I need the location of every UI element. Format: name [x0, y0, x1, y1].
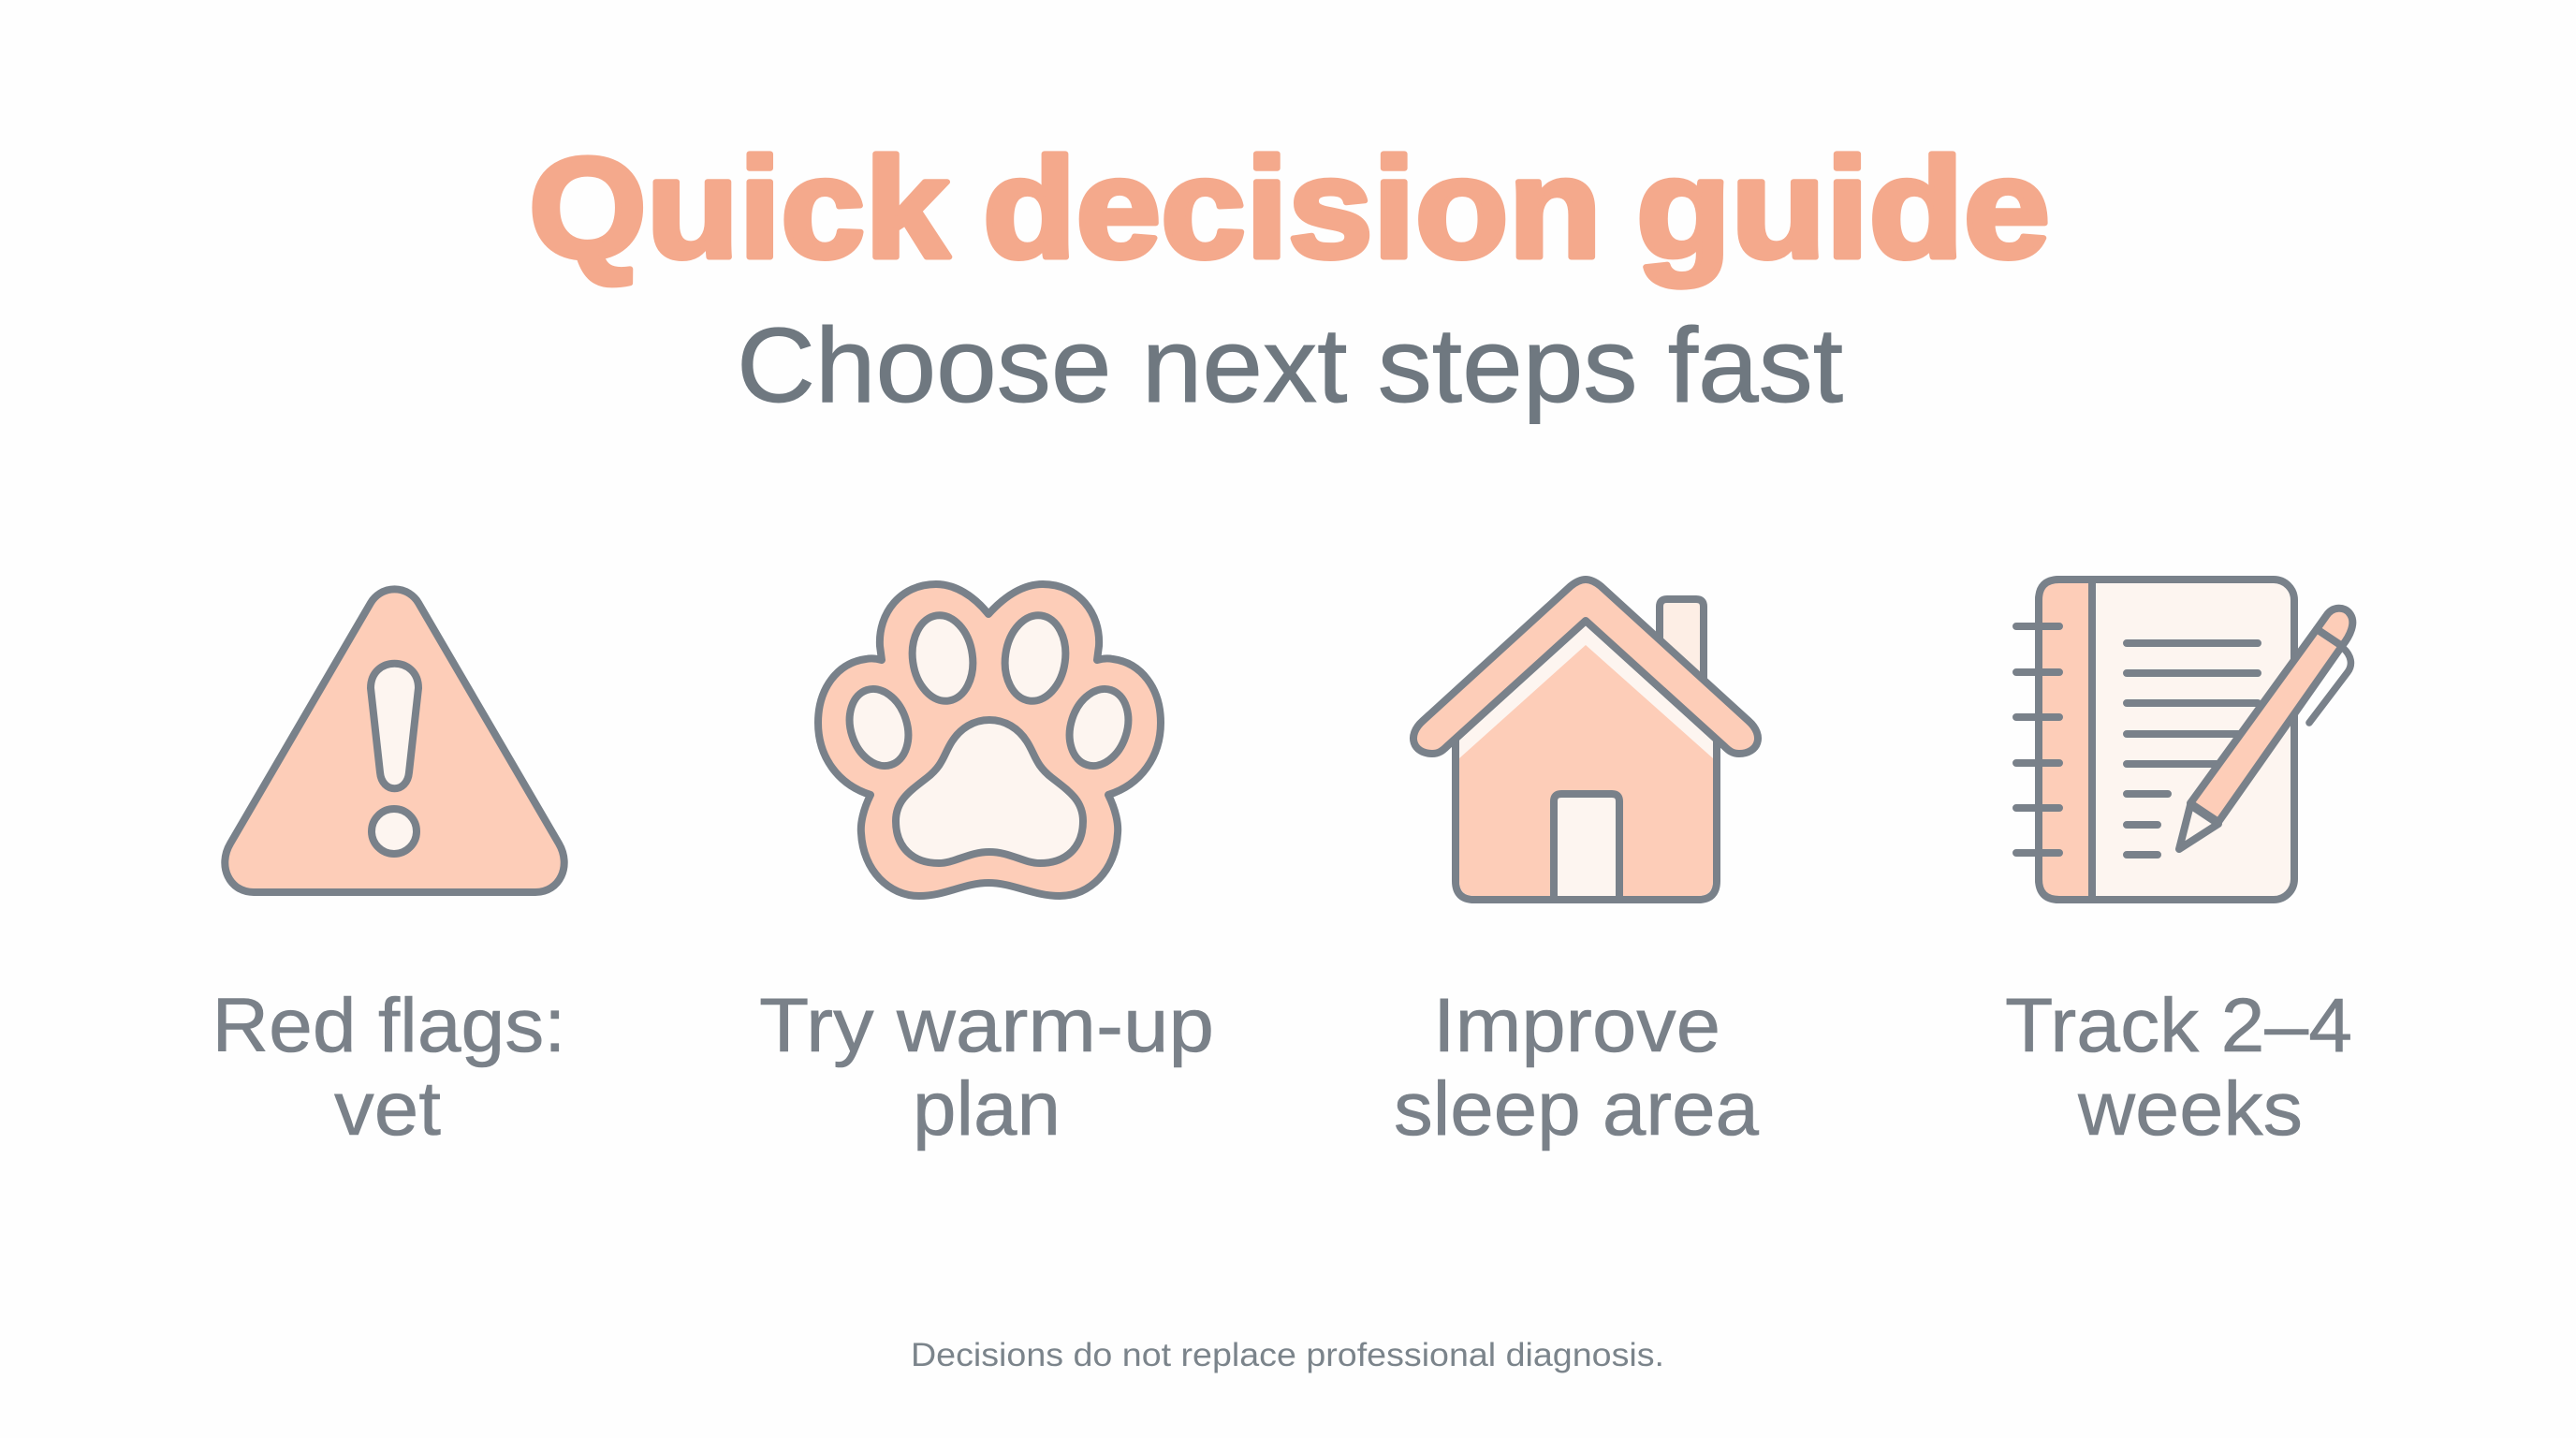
title: guide: [1636, 129, 2050, 288]
main pad: [896, 720, 1083, 863]
text lines: [2127, 643, 2258, 855]
label: sleep area: Improve: [1433, 983, 1720, 1068]
icon: paw print: [818, 584, 1161, 896]
title: Quick: [529, 129, 949, 288]
toe 1: [840, 682, 918, 773]
icon: notebook and pencil: [2016, 580, 2352, 900]
label: red flags: vet: [334, 1066, 441, 1152]
door: [1554, 794, 1619, 900]
toe 3: [1000, 611, 1071, 705]
label: red flags: [212, 983, 565, 1152]
icon: house: [1413, 580, 1758, 900]
icon: warning triangle: [225, 589, 564, 892]
title: decision: [983, 129, 1602, 288]
pencil body: [2190, 629, 2342, 822]
toe 2: [907, 611, 978, 705]
footer disclaimer: Decisions do not replace professional diagnosis.: [911, 1337, 1664, 1373]
label: warm-up plan: Try warm-up: [759, 983, 1214, 1068]
subtitle: Choose next steps fast: [737, 306, 1843, 424]
exclamation bar: [371, 664, 418, 788]
label: track weeks: Track 2–4: [2005, 983, 2352, 1068]
label: red flags: Red flags:: [212, 983, 565, 1068]
notebook spine: [2039, 580, 2092, 900]
house body: [1456, 621, 1717, 900]
notebook page: [2039, 580, 2294, 900]
pencil clip: [2309, 648, 2350, 723]
label: sleep area: sleep area: [1394, 1066, 1759, 1152]
toe 4: [1060, 682, 1138, 773]
spiral rings: [2016, 626, 2059, 853]
triangle body: [225, 589, 564, 892]
label: track weeks: weeks: [2077, 1066, 2303, 1152]
exclamation dot: [372, 809, 417, 854]
pencil eraser: [2317, 609, 2352, 646]
pencil tip: [2179, 805, 2218, 849]
roof: [1413, 580, 1758, 754]
label: sleep area: [1394, 983, 1759, 1152]
label: warm-up plan: [759, 983, 1214, 1152]
title: [529, 129, 2050, 288]
house front wall fill: [1459, 645, 1713, 896]
label: warm-up plan: plan: [913, 1066, 1061, 1152]
paw outline: [818, 584, 1161, 896]
chimney: [1660, 599, 1704, 697]
label: track weeks: [2005, 983, 2352, 1152]
